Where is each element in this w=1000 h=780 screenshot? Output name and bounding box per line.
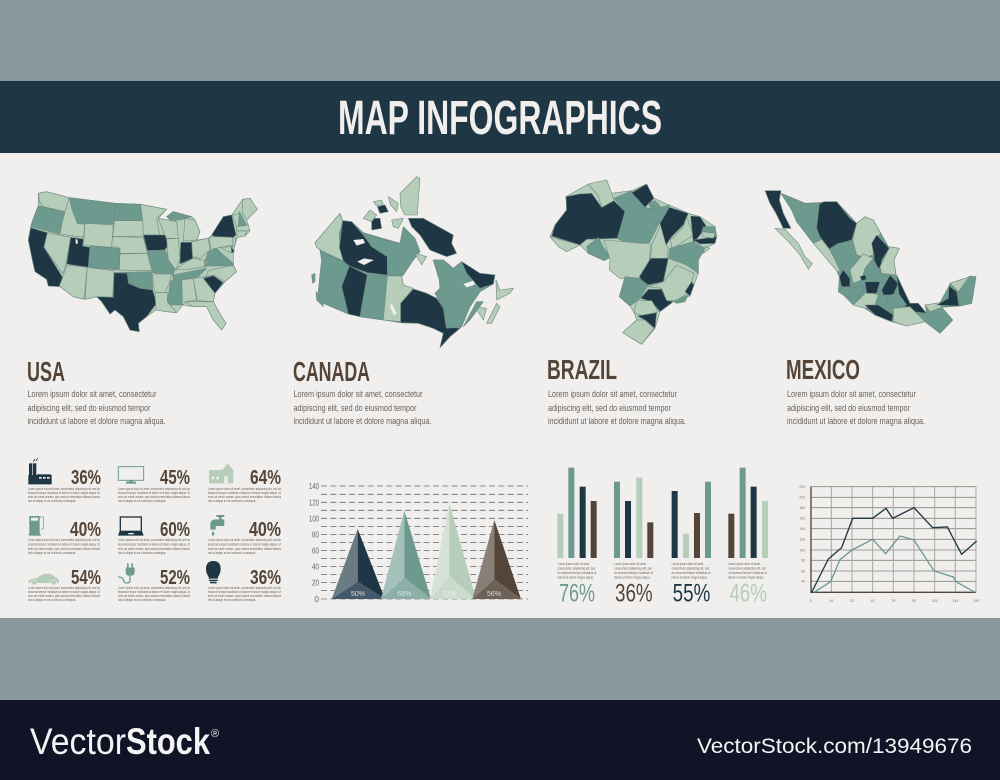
section: Brazil text	[547, 354, 686, 426]
stat: monitor 45%: enim ad minim veniam, quis nostrud exercitation ullamco laboris	[118, 495, 190, 499]
stat: water tap 40%: Lorem ipsum dolor sit amet, consectetur adipiscing elit, sed do	[208, 538, 281, 542]
section: Mexico text: incididunt ut labore et dolore magna aliqua.	[787, 416, 925, 426]
stat: car 54%	[28, 567, 101, 602]
bar group 55%: do eiusmod tempor incididunt ut	[672, 570, 711, 575]
map: Canada	[312, 177, 513, 348]
bar group 55%: Lorem ipsum dolor sit amet,	[672, 561, 704, 566]
bar group 76%: do eiusmod tempor incididunt ut	[558, 570, 597, 575]
stat: light bulb 36%: Lorem ipsum dolor sit amet, consectetur adipiscing elit, sed do	[208, 586, 281, 590]
bar group 46%: 46%	[729, 580, 767, 608]
title banner	[0, 81, 1000, 153]
section: Canada text: adipiscing elit, sed do eiusmod tempor	[294, 403, 416, 413]
stat: light bulb 36%: enim ad minim veniam, quis nostrud exercitation ullamco laboris	[208, 594, 281, 598]
stat: car 54%: Lorem ipsum dolor sit amet, consectetur adipiscing elit, sed do	[28, 586, 100, 590]
chart: line chart: 115	[932, 599, 938, 603]
chart: line chart: 0	[810, 599, 812, 603]
stat: plug 52%: enim ad minim veniam, quis nostrud exercitation ullamco laboris	[118, 594, 190, 598]
stat: monitor 45%: 45%	[160, 467, 190, 489]
stat: laptop 60%: enim ad minim veniam, quis nostrud exercitation ullamco laboris	[118, 547, 190, 551]
section: Mexico text: Lorem ipsum dolor sit amet, consectetur	[787, 389, 916, 399]
panel: icon statistics	[28, 458, 281, 602]
section: USA text: adipiscing elit, sed do eiusmod tempor	[28, 403, 150, 413]
section: Brazil text: adipiscing elit, sed do eiusmod tempor	[548, 403, 671, 413]
stat: water tap 40%: enim ad minim veniam, quis nostrud exercitation ullamco laboris	[208, 547, 281, 551]
stat: monitor 45%	[118, 467, 190, 503]
chart: pyramid chart: 0	[314, 594, 319, 604]
line: dark series	[812, 508, 977, 592]
stat: factory 36%	[28, 458, 101, 503]
pyramid 65%	[381, 511, 431, 599]
chart: line chart: 160	[799, 517, 805, 521]
stat: factory 36%: 36%	[71, 467, 101, 489]
chart: line chart: 200	[799, 496, 805, 500]
stat: car 54%: 54%	[71, 567, 101, 589]
stat: laptop 60%: eiusmod tempor incididunt ut labore et dolore magna aliqua. Ut	[118, 542, 190, 546]
section: Canada text: incididunt ut labore et dolore magna aliqua.	[294, 416, 432, 426]
section: USA text: Lorem ipsum dolor sit amet, consectetur	[28, 389, 156, 399]
bar group 76%: 76%	[559, 580, 595, 608]
stat: fuel pump 40%: nisi ut aliquip ex ea commodo consequat.	[28, 551, 76, 555]
bar group 36%: Lorem ipsum dolor sit amet,	[614, 561, 647, 566]
stat: fuel pump 40%: eiusmod tempor incididunt ut labore et dolore magna aliqua. Ut	[28, 542, 100, 546]
stat: water tap 40%: eiusmod tempor incididunt ut labore et dolore magna aliqua. Ut	[208, 542, 281, 546]
chart: line chart: 220	[799, 485, 805, 489]
chart: pyramid chart: 80	[312, 530, 319, 540]
bar group 76%: consectetur adipiscing elit, sed	[558, 565, 595, 570]
section: Brazil text: Lorem ipsum dolor sit amet, consectetur	[548, 389, 677, 399]
section: USA text: incididunt ut labore et dolore magna aliqua.	[28, 416, 166, 426]
line: teal series	[814, 536, 975, 592]
map: USA	[28, 192, 257, 332]
chart: line chart: 120	[799, 538, 805, 542]
pyramid 65%: 65%	[397, 591, 411, 598]
stat: monitor 45%: Lorem ipsum dolor sit amet, consectetur adipiscing elit, sed do	[118, 487, 190, 491]
footer image id: VectorStock.com/13949676	[697, 735, 972, 758]
chart: pyramid chart: 20	[312, 578, 319, 588]
stat: light bulb 36%: nisi ut aliquip ex ea commodo consequat.	[208, 598, 256, 602]
chart: line chart: 76	[891, 599, 895, 603]
stat: house 64%	[208, 463, 281, 503]
bar group 46%: labore et dolore magna aliqua.	[728, 575, 764, 580]
logo: VectorStock: VectorStock	[30, 721, 210, 762]
stat: laptop 60%: nisi ut aliquip ex ea commodo consequat.	[118, 551, 166, 555]
section: Mexico text	[786, 354, 925, 426]
bar group 76%: labore et dolore magna aliqua.	[558, 575, 594, 580]
bar group 36%	[614, 478, 654, 608]
section: Canada text	[293, 356, 432, 426]
chart: line chart: 100	[799, 548, 805, 552]
chart: pyramid chart: 120	[309, 497, 319, 507]
pyramid 56%	[472, 520, 521, 599]
chart: line chart: 61	[871, 599, 875, 603]
stat: plug 52%	[118, 563, 190, 602]
stat: house 64%: eiusmod tempor incididunt ut labore et dolore magna aliqua. Ut	[208, 491, 281, 495]
stat: house 64%: 64%	[250, 467, 281, 489]
stat: water tap 40%: nisi ut aliquip ex ea commodo consequat.	[208, 551, 256, 555]
chart: line chart: 31	[850, 599, 854, 603]
chart: line chart	[799, 485, 979, 603]
section: Brazil text: incididunt ut labore et dolore magna aliqua.	[548, 416, 686, 426]
stat: light bulb 36%	[206, 561, 281, 602]
pyramid 72%	[430, 503, 476, 599]
stat: water tap 40%: 40%	[249, 519, 281, 541]
bar group 55%: 55%	[673, 580, 710, 608]
bar group 46%	[728, 468, 768, 608]
section: Mexico text: adipiscing elit, sed do eiusmod tempor	[787, 403, 910, 413]
pyramid 56%: 56%	[487, 591, 501, 598]
stat: fuel pump 40%: 40%	[70, 519, 101, 541]
bar group 36%: 36%	[615, 580, 653, 608]
section: Brazil text: BRAZIL	[547, 354, 617, 385]
section: USA text	[27, 356, 166, 426]
section: Canada text: CANADA	[293, 356, 370, 387]
stat: factory 36%: eiusmod tempor incididunt ut labore et dolore magna aliqua. Ut	[28, 491, 100, 495]
stat: fuel pump 40%: enim ad minim veniam, quis nostrud exercitation ullamco laboris	[28, 547, 100, 551]
title banner: MAP INFOGRAPHICS	[338, 92, 662, 145]
chart: pyramid chart: 100	[309, 513, 319, 523]
stat: car 54%: eiusmod tempor incididunt ut labore et dolore magna aliqua. Ut	[28, 590, 100, 594]
chart: line chart: 16	[829, 599, 833, 603]
stat: light bulb 36%: eiusmod tempor incididunt ut labore et dolore magna aliqua. Ut	[208, 590, 281, 594]
bar group 55%: consectetur adipiscing elit, sed	[672, 565, 709, 570]
bar group 36%: do eiusmod tempor incididunt ut	[614, 570, 654, 575]
stat: plug 52%: eiusmod tempor incididunt ut labore et dolore magna aliqua. Ut	[118, 590, 190, 594]
stat: light bulb 36%: 36%	[250, 567, 281, 589]
map: Mexico	[765, 191, 976, 333]
stat: water tap 40%	[208, 515, 281, 555]
stat: factory 36%: enim ad minim veniam, quis nostrud exercitation ullamco laboris	[28, 495, 100, 499]
stat: laptop 60%: 60%	[160, 519, 190, 541]
chart: grouped bars	[557, 468, 768, 608]
stat: house 64%: nisi ut aliquip ex ea commodo consequat.	[208, 499, 256, 503]
stat: factory 36%: Lorem ipsum dolor sit amet, consectetur adipiscing elit, sed do	[28, 487, 100, 491]
chart: pyramid chart	[309, 481, 528, 604]
stat: factory 36%: nisi ut aliquip ex ea commodo consequat.	[28, 499, 76, 503]
bar group 76%: Lorem ipsum dolor sit amet,	[558, 561, 590, 566]
stat: fuel pump 40%	[28, 516, 101, 555]
chart: pyramid chart: 40	[312, 562, 319, 572]
bar group 76%	[557, 468, 597, 608]
chart: pyramid chart: 140	[309, 481, 319, 491]
chart: pyramid chart: 60	[312, 546, 319, 556]
section: USA text: USA	[27, 356, 65, 387]
stat: plug 52%: Lorem ipsum dolor sit amet, consectetur adipiscing elit, sed do	[118, 586, 190, 590]
bar group 36%: labore et dolore magna aliqua.	[614, 575, 650, 580]
stat: plug 52%: nisi ut aliquip ex ea commodo consequat.	[118, 598, 166, 602]
pyramid 50%	[332, 529, 385, 599]
stat: monitor 45%: eiusmod tempor incididunt ut labore et dolore magna aliqua. Ut	[118, 491, 190, 495]
pyramid 72%: 72%	[442, 591, 456, 598]
chart: line chart: 80	[801, 559, 805, 563]
stat: fuel pump 40%: Lorem ipsum dolor sit amet, consectetur adipiscing elit, sed do	[28, 538, 100, 542]
chart: line chart: 153	[973, 599, 979, 603]
stat: car 54%: nisi ut aliquip ex ea commodo consequat.	[28, 598, 76, 602]
bar group 46%: Lorem ipsum dolor sit amet,	[728, 561, 761, 566]
bar group 46%: do eiusmod tempor incididunt ut	[728, 570, 768, 575]
map: Brazil	[550, 180, 717, 344]
stat: house 64%: enim ad minim veniam, quis nostrud exercitation ullamco laboris	[208, 495, 281, 499]
stat: laptop 60%	[118, 517, 190, 555]
chart: line chart: 60	[801, 569, 805, 573]
bar group 55%: labore et dolore magna aliqua.	[672, 575, 708, 580]
chart: line chart: 134	[952, 599, 958, 603]
stat: monitor 45%: nisi ut aliquip ex ea commodo consequat.	[118, 499, 166, 503]
bar group 55%	[672, 482, 711, 608]
stat: car 54%: enim ad minim veniam, quis nostrud exercitation ullamco laboris	[28, 594, 100, 598]
chart: line chart: 40	[801, 580, 805, 584]
section: Canada text: Lorem ipsum dolor sit amet, consectetur	[294, 389, 422, 399]
chart: line chart: 93	[912, 599, 916, 603]
chart: line chart: 140	[799, 527, 805, 531]
bar group 36%: consectetur adipiscing elit, sed	[614, 565, 652, 570]
bar group 46%: consectetur adipiscing elit, sed	[728, 565, 766, 570]
footer bar	[0, 700, 1000, 780]
section: Mexico text: MEXICO	[786, 354, 860, 385]
logo registered mark: ®	[211, 728, 219, 740]
stat: plug 52%: 52%	[160, 567, 190, 589]
pyramid 50%: 50%	[351, 591, 365, 598]
stat: house 64%: Lorem ipsum dolor sit amet, consectetur adipiscing elit, sed do	[208, 487, 281, 491]
chart: line chart: 180	[799, 506, 805, 510]
stat: laptop 60%: Lorem ipsum dolor sit amet, consectetur adipiscing elit, sed do	[118, 538, 190, 542]
